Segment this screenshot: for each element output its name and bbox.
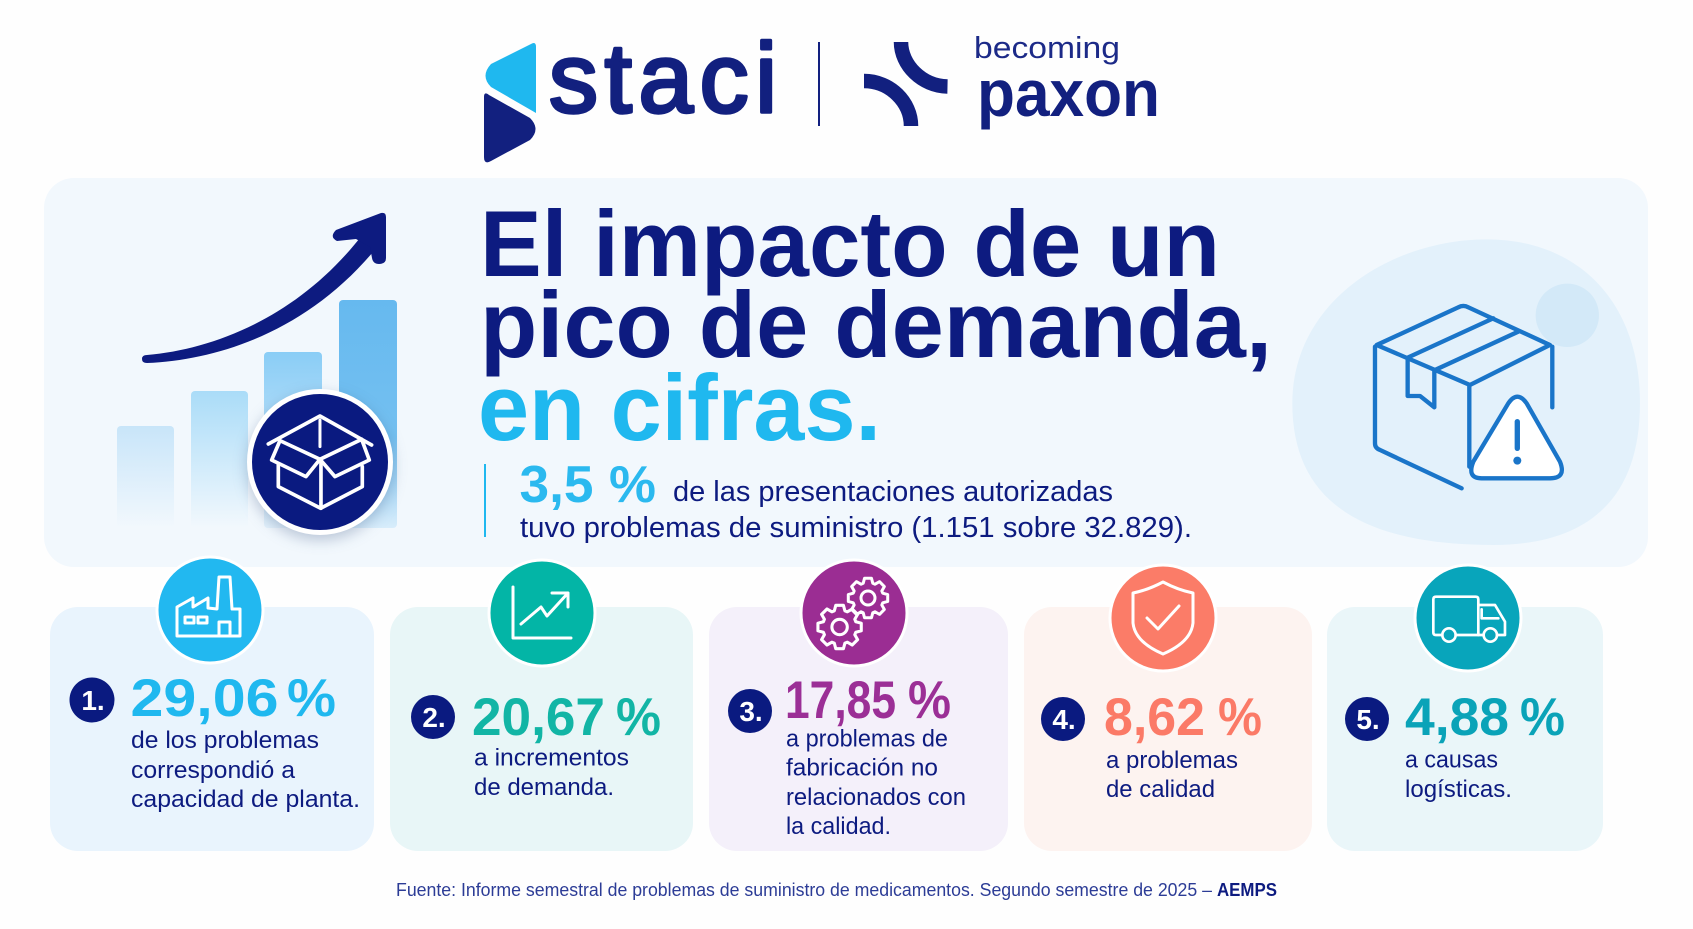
figure: 20,67 %: % — [616, 688, 661, 747]
key figure: 3,5 %: de las presentaciones autorizadas — [673, 476, 1113, 508]
badge: 4: 4. — [1052, 704, 1076, 735]
panel: card 4 quality — [1024, 565, 1312, 851]
text: card 1 description: correspondió a — [131, 757, 295, 784]
figure: 4,88 % — [1405, 688, 1565, 747]
figure: 8,62 %: % — [1218, 688, 1262, 747]
badge: 1: 1. — [81, 685, 105, 716]
title — [478, 191, 1272, 460]
key figure: 3,5 %: % — [609, 456, 656, 514]
text: card 3 description: a problemas de — [786, 726, 948, 752]
icon: truck — [1415, 565, 1521, 671]
panel: hero — [44, 178, 1648, 567]
figure: 8,62 % — [1104, 688, 1262, 747]
wordmark: paxon: paxon — [977, 56, 1160, 130]
key figure: 3,5 %: 3,5 — [520, 456, 594, 514]
figure: 8,62 %: 8,62 — [1104, 688, 1205, 747]
text: card 3 description — [786, 726, 966, 840]
icon: box with warning — [1292, 239, 1640, 545]
text: card 2 description: de demanda. — [474, 774, 614, 801]
text: card 2 description: a incrementos — [474, 744, 629, 772]
badge: 2: 2. — [422, 702, 446, 733]
title: en cifras. — [478, 355, 881, 460]
figure: 29,06 %: 29,06 — [130, 669, 278, 728]
text: card 5 description: logísticas. — [1405, 776, 1512, 803]
figure: 4,88 %: % — [1520, 688, 1565, 747]
text: card 3 description: fabricación no — [786, 754, 938, 782]
badge: 5 — [1345, 697, 1389, 741]
figure: 20,67 %: 20,67 — [472, 688, 605, 747]
key figure: 3,5 % — [484, 456, 1192, 544]
text: card 1 description: de los problemas — [131, 727, 319, 754]
text: becoming: becoming — [974, 30, 1120, 65]
panel: card 1 plant capacity — [50, 557, 374, 851]
divider between logos — [818, 42, 820, 126]
figure: 29,06 %: % — [287, 669, 336, 728]
text: card 1 description — [131, 727, 360, 813]
arrow: growth — [142, 213, 386, 363]
text: card 1 description: capacidad de planta. — [131, 786, 360, 813]
text: card 2 description — [474, 744, 629, 801]
icon: staci mark — [484, 43, 536, 162]
badge: 3 — [728, 689, 772, 733]
source footnote: AEMPS — [1217, 880, 1277, 900]
icon: open box badge — [250, 392, 390, 532]
text: card 4 description: de calidad — [1106, 776, 1215, 803]
text: card 3 description: relacionados con — [786, 784, 966, 811]
bar chart — [117, 300, 397, 528]
title: pico de demanda, — [480, 272, 1272, 377]
key figure: 3,5 %: tuvo problemas de suministro (1.151 sobre 32.829). — [520, 512, 1192, 544]
figure: 17,85 %: 17,85 — [785, 671, 896, 730]
wordmark: staci: staci — [549, 23, 777, 133]
figure: 17,85 %: % — [908, 671, 951, 730]
logo: becoming paxon — [864, 30, 1160, 130]
figure: 29,06 % — [130, 669, 336, 728]
source footnote: Fuente: Informe semestral de problemas de suministro de medicamentos. Segundo semestre de 2025 – — [396, 880, 1212, 900]
logo: staci — [484, 23, 777, 162]
title: El impacto de un — [480, 191, 1220, 296]
badge: 4 — [1041, 697, 1085, 741]
icon: shield with check — [1110, 565, 1216, 671]
icon: gears — [801, 560, 907, 666]
badge: 1 — [70, 678, 114, 722]
panel: card 3 manufacturing — [709, 560, 1008, 851]
text: card 5 description — [1405, 746, 1512, 803]
icon: rising chart — [489, 560, 595, 666]
figure: 4,88 %: 4,88 — [1405, 688, 1509, 747]
badge: 2 — [411, 695, 455, 739]
icon: factory — [157, 557, 263, 663]
panel: card 5 logistics — [1327, 565, 1603, 851]
text: card 5 description: a causas — [1405, 746, 1498, 774]
icon: paxon mark — [864, 42, 948, 126]
text: card 3 description: la calidad. — [786, 813, 891, 840]
text: card 4 description — [1106, 747, 1238, 803]
text: card 4 description: a problemas — [1106, 747, 1238, 774]
panel: card 2 demand increases — [390, 560, 693, 851]
badge: 3: 3. — [739, 696, 763, 727]
badge: 5: 5. — [1356, 704, 1380, 735]
